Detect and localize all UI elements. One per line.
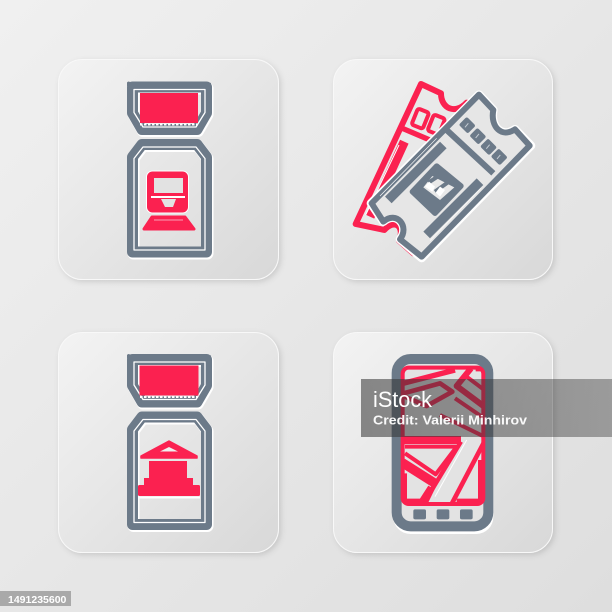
red ticket xyxy=(356,84,467,253)
icon: museum building xyxy=(138,441,200,498)
panel: two tickets xyxy=(334,60,552,280)
map routes xyxy=(402,368,484,504)
panel: museum ticket xyxy=(58,332,278,552)
image id label xyxy=(0,591,71,606)
panel: train ticket xyxy=(58,60,278,280)
icon: train ticket xyxy=(127,82,211,254)
watermark band xyxy=(361,379,612,437)
watermark credit text: Credit: Valerii Minhirov xyxy=(373,412,528,428)
image id label: 1491235600 xyxy=(8,594,67,606)
phone buttons xyxy=(413,509,473,519)
gray ticket xyxy=(371,95,531,258)
icon: museum ticket xyxy=(127,354,211,526)
ticket stub fill xyxy=(140,93,198,123)
icon: train xyxy=(144,171,194,229)
ticket stub fill xyxy=(140,366,198,396)
vehicle xyxy=(412,166,461,213)
watermark logo text: iStock xyxy=(373,387,433,412)
icon: phone with map xyxy=(395,357,492,532)
panel: phone map xyxy=(334,332,552,552)
icon: tickets xyxy=(356,84,531,258)
